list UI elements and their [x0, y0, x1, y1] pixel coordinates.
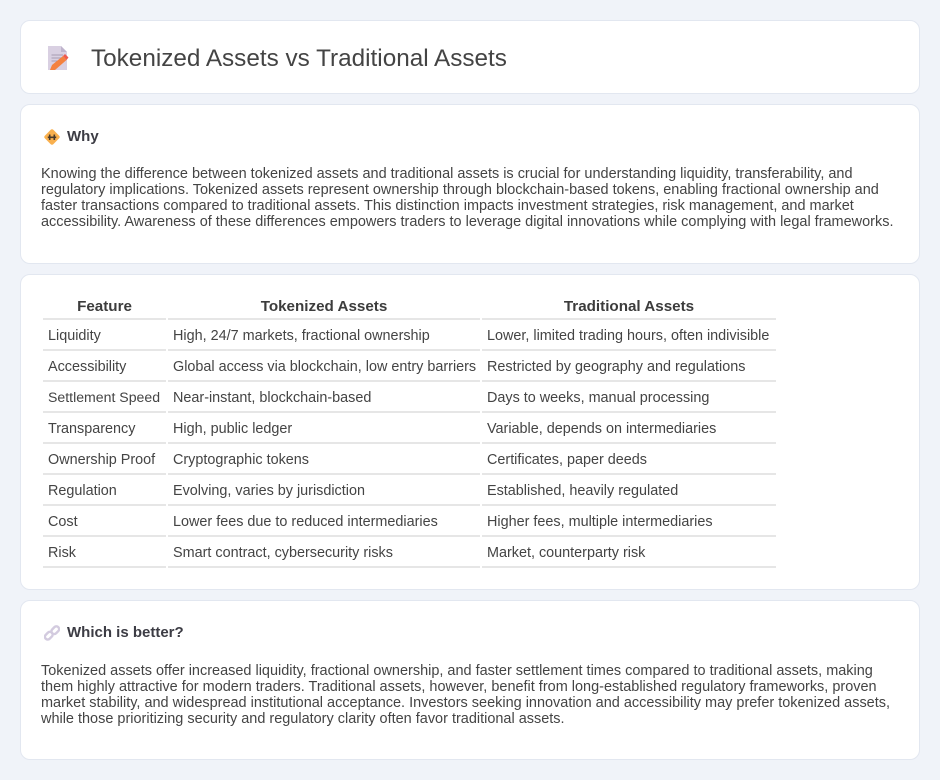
table: feature comparison: Liquidity: [48, 328, 101, 344]
table: feature comparison: Global access via blockchain, low entry barriers: [173, 359, 476, 375]
icon: document with pencil: [48, 46, 68, 70]
text: which is better paragraph: them highly attractive for modern traders. Traditional assets, however, benefit from long-established regulatory frameworks, proven: [41, 679, 877, 695]
table: feature comparison: Market, counterparty risk: [487, 545, 645, 561]
table: feature comparison: Lower fees due to reduced intermediaries: [173, 514, 438, 530]
table: feature comparison: Traditional Assets: [564, 298, 694, 315]
table: feature comparison: Near-instant, blockchain-based: [173, 390, 371, 406]
text: why paragraph: [41, 166, 893, 230]
text: which is better paragraph: market stability, and widespread institutional acceptance. Investors seeking innovation and accessibility may prefer tokenized assets,: [41, 695, 890, 711]
table: feature comparison: [43, 298, 776, 568]
panel: why: [20, 104, 920, 264]
icon: link: [44, 625, 60, 641]
table: feature comparison: Smart contract, cybersecurity risks: [173, 545, 393, 561]
table: feature comparison: Regulation: [48, 483, 117, 499]
text: why paragraph: Knowing the difference between tokenized assets and traditional assets is crucial for understanding liquidity, transferability, and: [41, 166, 853, 182]
title: Tokenized Assets vs Traditional Assets: [91, 45, 507, 72]
table: feature comparison: Certificates, paper deeds: [487, 452, 647, 468]
table: feature comparison: Risk: [48, 545, 76, 561]
table: feature comparison: Higher fees, multiple intermediaries: [487, 514, 713, 530]
table: feature comparison: Cost: [48, 514, 78, 530]
table: feature comparison: High, public ledger: [173, 421, 292, 437]
text: which is better paragraph: Tokenized assets offer increased liquidity, fractional ownership, and faster settlement times compared to traditional assets, making: [41, 663, 873, 679]
table: feature comparison: Evolving, varies by jurisdiction: [173, 483, 365, 499]
panel: header: [20, 20, 920, 94]
table: feature comparison: Variable, depends on intermediaries: [487, 421, 716, 437]
text: why paragraph: accessibility. Awareness of these differences empowers traders to leverage digital innovations while complying with legal frameworks.: [41, 214, 893, 230]
table: feature comparison: Established, heavily regulated: [487, 483, 678, 499]
table: feature comparison: Ownership Proof: [48, 452, 155, 468]
table: feature comparison: Feature: [77, 298, 132, 315]
table: feature comparison: Tokenized Assets: [261, 298, 387, 315]
heading: which is better: Which is better?: [67, 624, 184, 641]
heading: why: Why: [67, 128, 99, 145]
text: why paragraph: faster transactions compared to traditional assets. This distinction impacts investment strategies, risk management, and market: [41, 198, 854, 214]
table: feature comparison: Accessibility: [48, 359, 126, 375]
table: feature comparison: Transparency: [48, 421, 135, 437]
text: which is better paragraph: [41, 663, 890, 727]
table: feature comparison: Lower, limited trading hours, often indivisible: [487, 328, 769, 344]
icon: warning diamond: [44, 129, 60, 145]
table: feature comparison: Restricted by geography and regulations: [487, 359, 745, 375]
text: why paragraph: regulatory implications. Tokenized assets represent ownership through blockchain-based tokens, enabling fractional ownership and: [41, 182, 879, 198]
table: feature comparison: Settlement Speed: [48, 389, 160, 405]
table: feature comparison: Cryptographic tokens: [173, 452, 309, 468]
table: feature comparison: Days to weeks, manual processing: [487, 390, 709, 406]
panel: comparison table: [20, 274, 920, 590]
table: feature comparison: High, 24/7 markets, fractional ownership: [173, 328, 430, 344]
panel: which is better: [20, 600, 920, 760]
text: which is better paragraph: while those prioritizing security and regulatory clarity often favor traditional assets.: [41, 711, 565, 727]
